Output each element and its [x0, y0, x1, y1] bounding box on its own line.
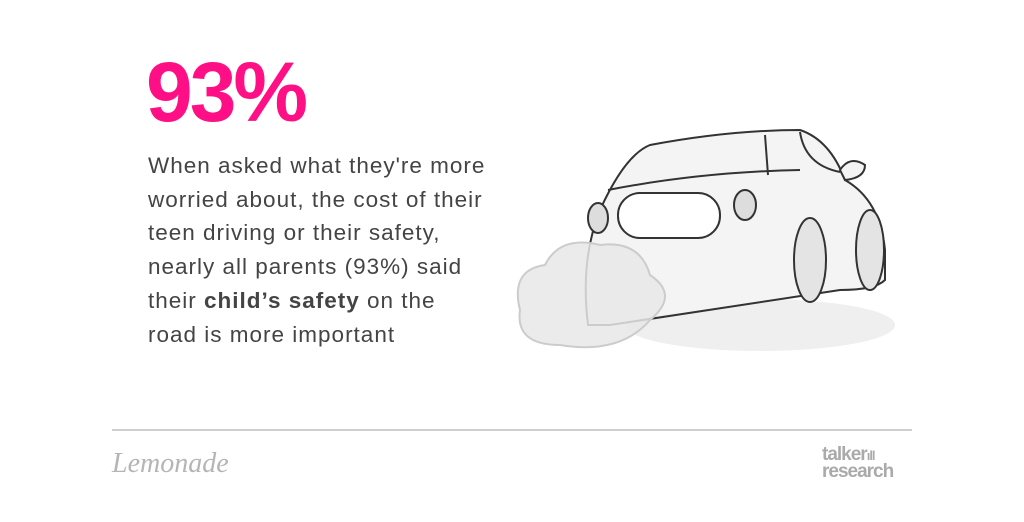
body text: road is more important — [148, 322, 395, 347]
logo: talker research — [822, 444, 894, 482]
body text: When asked what they're more — [148, 153, 485, 178]
logo: Lemonade: Lemonade — [112, 448, 229, 479]
logo: talker research: research — [822, 461, 893, 482]
body text: teen driving or their safety, — [148, 220, 440, 245]
body text: their child’s safety on the — [148, 288, 436, 313]
body text: nearly all parents (93%) said — [148, 254, 462, 279]
body text: worried about, the cost of their — [148, 187, 483, 212]
illustration: car with smoke — [516, 129, 895, 351]
headline stat: 93% — [146, 45, 305, 139]
logo: talker research: talkerıll — [822, 444, 875, 465]
body text — [148, 153, 485, 347]
